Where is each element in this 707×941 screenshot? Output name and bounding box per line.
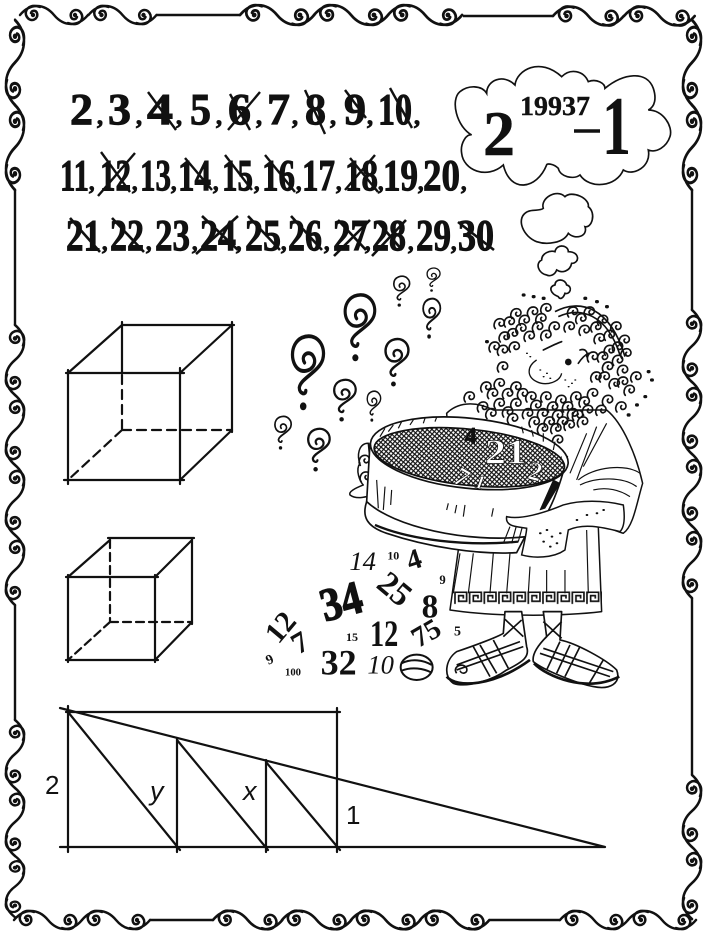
- row 11 to 20: ,: [89, 170, 94, 195]
- row 21 to 30: 29: [416, 211, 451, 260]
- numbers in sieve: 21: [485, 432, 527, 471]
- row 2 to 10: ,: [176, 104, 182, 130]
- row 21 to 30: 24: [200, 211, 236, 260]
- falling numbers: 9: [439, 573, 446, 587]
- row 2 to 10: 2: [70, 85, 93, 134]
- falling numbers: 5: [454, 624, 461, 639]
- sieve lower band: [365, 497, 537, 553]
- row 11 to 20: 18: [345, 151, 378, 200]
- row 11 to 20: ,: [336, 170, 342, 195]
- row 11 to 20: 19: [383, 151, 418, 200]
- triangle construction lines: [60, 706, 605, 852]
- large cube: [64, 322, 234, 484]
- row 2 to 10: 5: [190, 85, 211, 134]
- row 21 to 30: ,: [281, 230, 286, 255]
- label 2: 2: [45, 770, 59, 800]
- row 21 to 30: ,: [102, 230, 108, 255]
- row 2 to 10: ,: [330, 104, 336, 130]
- numbers in sieve: 2: [525, 455, 546, 488]
- row 11 to 20: ,: [254, 170, 260, 195]
- row 21 to 30: ,: [192, 230, 198, 255]
- row 21 to 30: 26: [288, 211, 322, 260]
- falling numbers: 8: [422, 589, 438, 626]
- falling numbers: [258, 542, 461, 682]
- border: right edge: [683, 20, 701, 919]
- falling numbers: 25: [370, 564, 419, 614]
- row 2 to 10: 7: [267, 85, 290, 134]
- right hand: [506, 501, 624, 557]
- row 11 to 20: ,: [296, 170, 302, 195]
- falling numbers: 14: [349, 546, 376, 576]
- stray hair dots: [487, 295, 652, 415]
- row 11 to 20: 20: [423, 151, 460, 200]
- hair and beard curls: [464, 304, 641, 445]
- row 11 to 20: 11: [60, 151, 89, 200]
- falling numbers: 32: [321, 642, 357, 682]
- row 2 to 10: 9: [344, 85, 366, 134]
- label y: y: [148, 776, 165, 806]
- cloud outline: [455, 67, 671, 185]
- row 11 to 20: 13: [140, 151, 171, 200]
- robe and sleeve: [447, 404, 643, 615]
- row 2 to 10: 4: [147, 85, 173, 134]
- row 21 to 30: ,: [236, 230, 242, 255]
- label x: x: [241, 776, 258, 806]
- falling numbers: 12: [258, 605, 303, 649]
- row 2 to 10: ,: [136, 104, 142, 130]
- border: left edge: [6, 20, 24, 917]
- row 21 to 30: 23: [155, 211, 190, 260]
- row 21 to 30: 28: [372, 211, 406, 260]
- falling numbers: 34: [314, 571, 368, 632]
- sieve rim and mesh: [367, 408, 572, 498]
- label 1: 1: [346, 800, 360, 830]
- ankles and sandals: [447, 612, 619, 687]
- row 21 to 30: ,: [146, 230, 152, 255]
- row 2 to 10: 3: [108, 85, 131, 134]
- formula: [483, 80, 631, 173]
- falling numbers: 15: [346, 630, 358, 644]
- row 2 to 10: ,: [414, 104, 420, 130]
- falling numbers: 10: [367, 649, 394, 679]
- falling numbers: 4: [402, 542, 426, 577]
- thought cloud with 2^19937 - 1: [455, 67, 671, 185]
- falling numbers: 10: [387, 548, 399, 562]
- falling numbers: 7: [285, 625, 315, 661]
- row 2 to 10: ,: [367, 104, 373, 130]
- similar triangles diagram: [45, 706, 605, 852]
- question marks: [275, 268, 440, 472]
- philosopher with sieve: [258, 194, 652, 687]
- greek key hem: [454, 591, 602, 605]
- falling numbers: 9: [264, 652, 276, 669]
- head and face: [515, 329, 598, 406]
- formula: 19937: [520, 91, 590, 121]
- border: bottom edge: [14, 911, 696, 929]
- row 2 to 10: ,: [256, 104, 262, 130]
- row 11 to 20: 12: [100, 151, 131, 200]
- row 2 to 10: ,: [216, 104, 222, 130]
- left hand at sieve rim: [350, 443, 373, 498]
- small cube: [66, 538, 194, 662]
- row 2 to 10: 6: [228, 85, 251, 134]
- row 11 to 20: [60, 151, 466, 200]
- row 11 to 20: ,: [378, 170, 384, 195]
- row 21 to 30: 22: [110, 211, 144, 260]
- row 11 to 20: 14: [178, 151, 211, 200]
- row 21 to 30: [66, 211, 494, 260]
- row 11 to 20: 15: [222, 151, 253, 200]
- row 2 to 10: [70, 85, 420, 134]
- row 21 to 30: 30: [458, 211, 494, 260]
- row 21 to 30: ,: [408, 230, 414, 255]
- row 21 to 30: ,: [365, 230, 370, 255]
- row 11 to 20: 17: [302, 151, 335, 200]
- border: top edge: [20, 5, 695, 25]
- numbers in sieve: [449, 423, 546, 495]
- row 21 to 30: 25: [245, 211, 281, 260]
- falling numbers: 12: [370, 613, 398, 654]
- row 21 to 30: 21: [66, 211, 101, 260]
- sieve: [350, 408, 572, 553]
- formula: 2: [483, 98, 515, 169]
- formula: 1: [602, 80, 631, 173]
- row 2 to 10: 10: [378, 85, 412, 134]
- row 11 to 20: 16: [262, 151, 295, 200]
- numbers in sieve: 1: [472, 471, 489, 495]
- row 11 to 20: ,: [171, 170, 176, 195]
- falling numbers: 100: [285, 667, 301, 678]
- falling numbers: 75: [406, 612, 447, 654]
- headband: [555, 306, 625, 357]
- small thought clouds: [521, 194, 593, 298]
- row 11 to 20: ,: [461, 170, 466, 195]
- row 2 to 10: ,: [97, 104, 103, 130]
- number rows with crossed-out composites: [60, 85, 494, 260]
- row 11 to 20: ,: [418, 170, 424, 195]
- row 2 to 10: 8: [305, 85, 326, 134]
- row 2 to 10: ,: [292, 104, 298, 130]
- numbers in sieve: 4: [465, 423, 477, 449]
- numbers in sieve: 7: [449, 461, 475, 493]
- row 21 to 30: 27: [333, 211, 368, 260]
- row 21 to 30: ,: [324, 230, 330, 255]
- row 21 to 30: ,: [451, 230, 456, 255]
- row 11 to 20: ,: [132, 170, 138, 195]
- row 11 to 20: ,: [213, 170, 218, 195]
- sieve side wall: [367, 443, 567, 538]
